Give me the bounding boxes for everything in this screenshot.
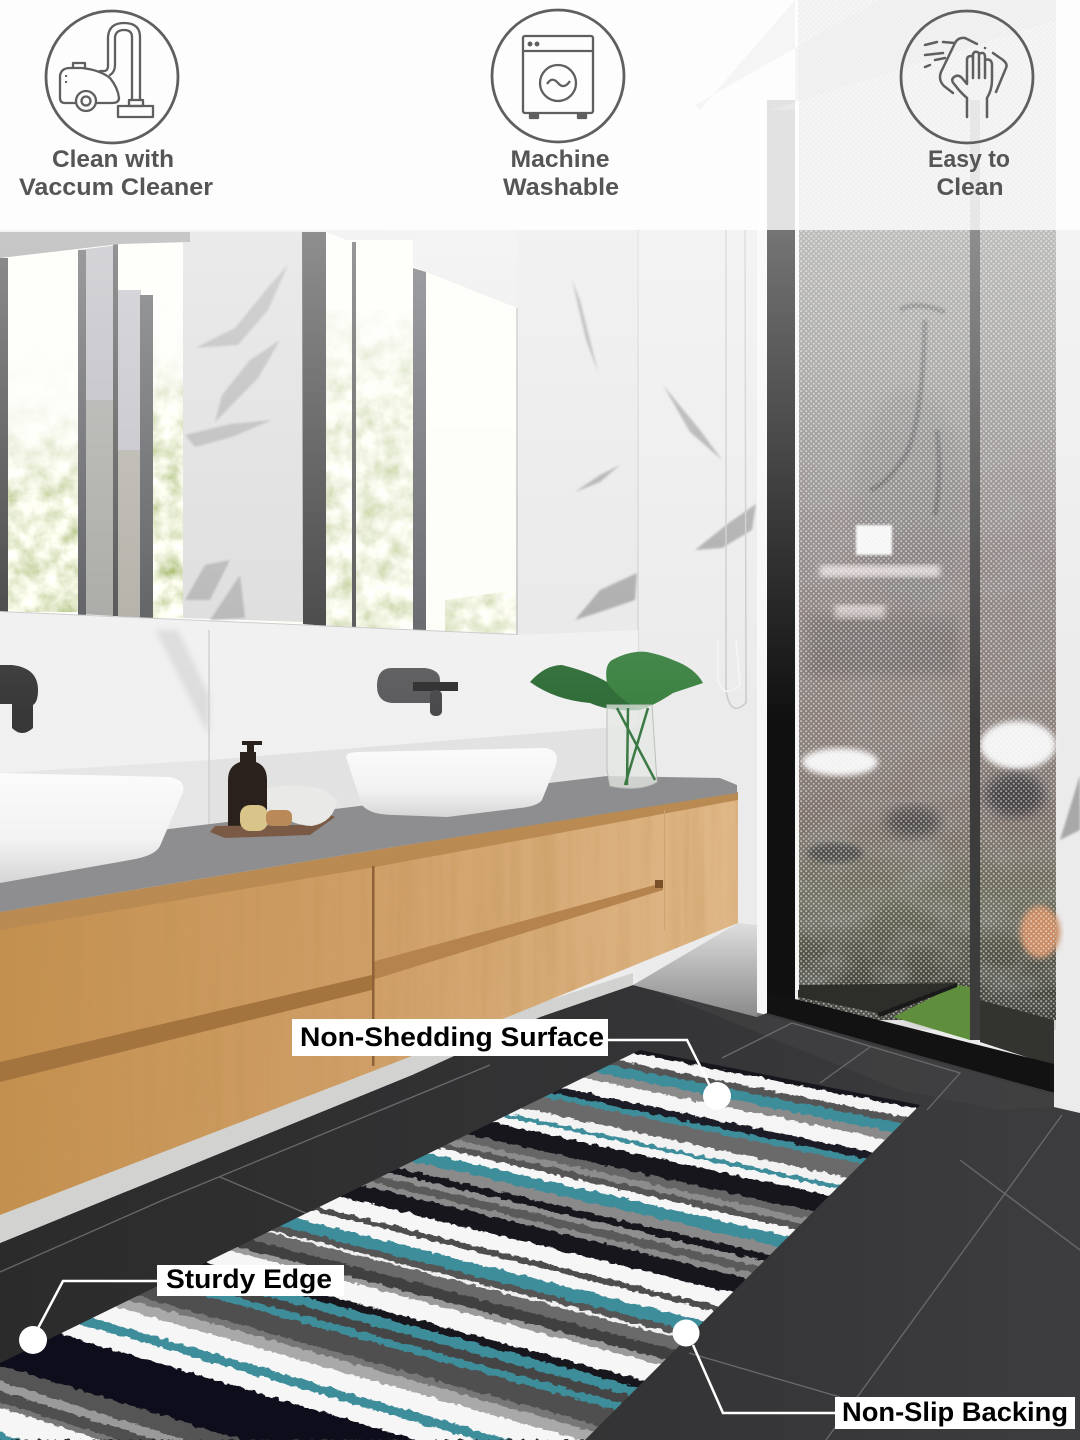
- window: perforated glass with frame: [757, 0, 1060, 1093]
- left sink: [0, 773, 183, 883]
- callout: sturdy edge: [19, 1264, 344, 1354]
- baseboard: [0, 973, 633, 1243]
- countertop: [0, 776, 737, 912]
- label: machine washable: Washable: [503, 174, 619, 201]
- icon: vacuum cleaner: [46, 11, 178, 143]
- plant in glass vase: [530, 652, 703, 788]
- label: clean with vaccum cleaner: Clean with: [52, 146, 174, 173]
- hanging shower cord: [718, 230, 746, 708]
- feature: machine washable: [492, 10, 624, 201]
- mirror with reflection: [0, 232, 517, 635]
- icon: hand wiping with cloth: [901, 11, 1033, 143]
- soap bottle: [228, 741, 267, 830]
- right faucet: [377, 668, 458, 716]
- label: clean with vaccum cleaner: Vaccum Cleaner: [19, 174, 213, 201]
- right sink: [346, 748, 557, 817]
- feature: clean with vacuum cleaner: [19, 11, 213, 201]
- marble wall panels: [517, 0, 1080, 1120]
- left faucet: [0, 665, 38, 733]
- rug with stripes: [0, 1050, 920, 1440]
- floor with tile lines: [0, 985, 1080, 1440]
- feature: easy to clean: [901, 11, 1033, 201]
- white haze on the upper scene: [0, 230, 1080, 720]
- callout: non-slip backing: Non-Slip Backing: [842, 1397, 1068, 1427]
- label: easy to clean: Easy to: [928, 146, 1010, 173]
- wall under vanity: [633, 923, 757, 1017]
- window beam fading into top band: [695, 0, 1056, 110]
- marble backsplash under mirror: [0, 612, 638, 850]
- label: easy to clean: Clean: [936, 174, 1004, 201]
- label: machine washable: Machine: [510, 146, 610, 173]
- translucent top band: [0, 0, 1080, 230]
- towel, brush and tray: [210, 785, 337, 838]
- vanity cabinet: wood drawers: [0, 792, 738, 1215]
- callout: non-shedding surface: [292, 1019, 731, 1110]
- callout: sturdy edge: Sturdy Edge: [166, 1264, 332, 1294]
- callout: non-shedding surface: Non-Shedding Surface: [300, 1022, 604, 1052]
- callout: non-slip backing: [672, 1320, 1075, 1429]
- icon: washing machine: [492, 10, 624, 142]
